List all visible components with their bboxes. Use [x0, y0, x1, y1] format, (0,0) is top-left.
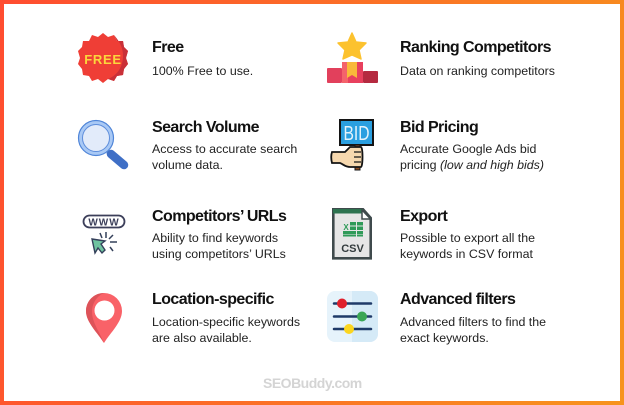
icon: csv file: CSV	[341, 243, 364, 255]
heading block: Export: Export	[400, 208, 447, 225]
icon: csv file: X	[343, 223, 349, 232]
heading block: Location-specific	[152, 291, 300, 345]
icon: hand holding bid sign: BID	[344, 123, 370, 145]
heading block: Ranking Competitors	[400, 39, 555, 78]
icon: free badge: FREE	[84, 52, 122, 67]
icon: csv file	[332, 208, 372, 260]
watermark: SEOBuddy.com: SEOBuddy.com	[263, 375, 362, 391]
icon: free badge	[78, 33, 128, 83]
heading block: Free: 100% Free to use.	[152, 64, 253, 78]
heading block: Location-specific: Location-specific	[152, 291, 274, 308]
heading block: Advanced filters: Advanced filters to find the	[400, 315, 546, 329]
heading block: Export: keywords in CSV format	[400, 247, 533, 261]
heading block: Search Volume: Search Volume	[152, 119, 259, 136]
heading block: Search Volume: volume data.	[152, 158, 223, 172]
heading block: Competitors' URLs: Competitors’ URLs	[152, 208, 286, 225]
heading block: Advanced filters	[400, 291, 546, 345]
heading block: Export: Possible to export all the	[400, 231, 535, 245]
heading block: Export	[400, 208, 535, 261]
heading block: Free: Free	[152, 39, 184, 56]
heading block: Location-specific: Location-specific keywords	[152, 315, 300, 329]
heading block: Ranking Competitors: Data on ranking competitors	[400, 64, 555, 78]
heading block: Advanced filters: exact keywords.	[400, 331, 489, 345]
heading block: Bid Pricing	[400, 119, 544, 172]
heading block: Competitors' URLs: using competitors’ URLs	[152, 247, 286, 261]
heading block: Bid Pricing: Accurate Google Ads bid	[400, 142, 536, 156]
heading block: Competitors' URLs	[152, 208, 286, 261]
icon: filter sliders	[327, 291, 378, 342]
heading block: Competitors' URLs: Ability to find keywords	[152, 231, 278, 245]
icon: magnifying glass	[78, 120, 128, 170]
heading block: Bid Pricing: Bid Pricing	[400, 119, 478, 136]
heading block: Advanced filters: Advanced filters	[400, 291, 515, 308]
heading block: Bid Pricing: pricing (low and high bids)	[400, 158, 544, 172]
icon: location pin	[86, 293, 122, 343]
icon: ranking podium with star	[327, 32, 378, 83]
heading block: Ranking Competitors: Ranking Competitors	[400, 39, 551, 56]
heading block: Search Volume: Access to accurate search	[152, 142, 297, 156]
icon: www click: WWW	[88, 218, 120, 228]
heading block: Free	[152, 39, 253, 78]
heading block: Search Volume	[152, 119, 297, 172]
icon: www click	[82, 214, 126, 255]
icon: hand holding bid sign	[330, 119, 374, 170]
heading block: Location-specific: are also available.	[152, 331, 252, 345]
